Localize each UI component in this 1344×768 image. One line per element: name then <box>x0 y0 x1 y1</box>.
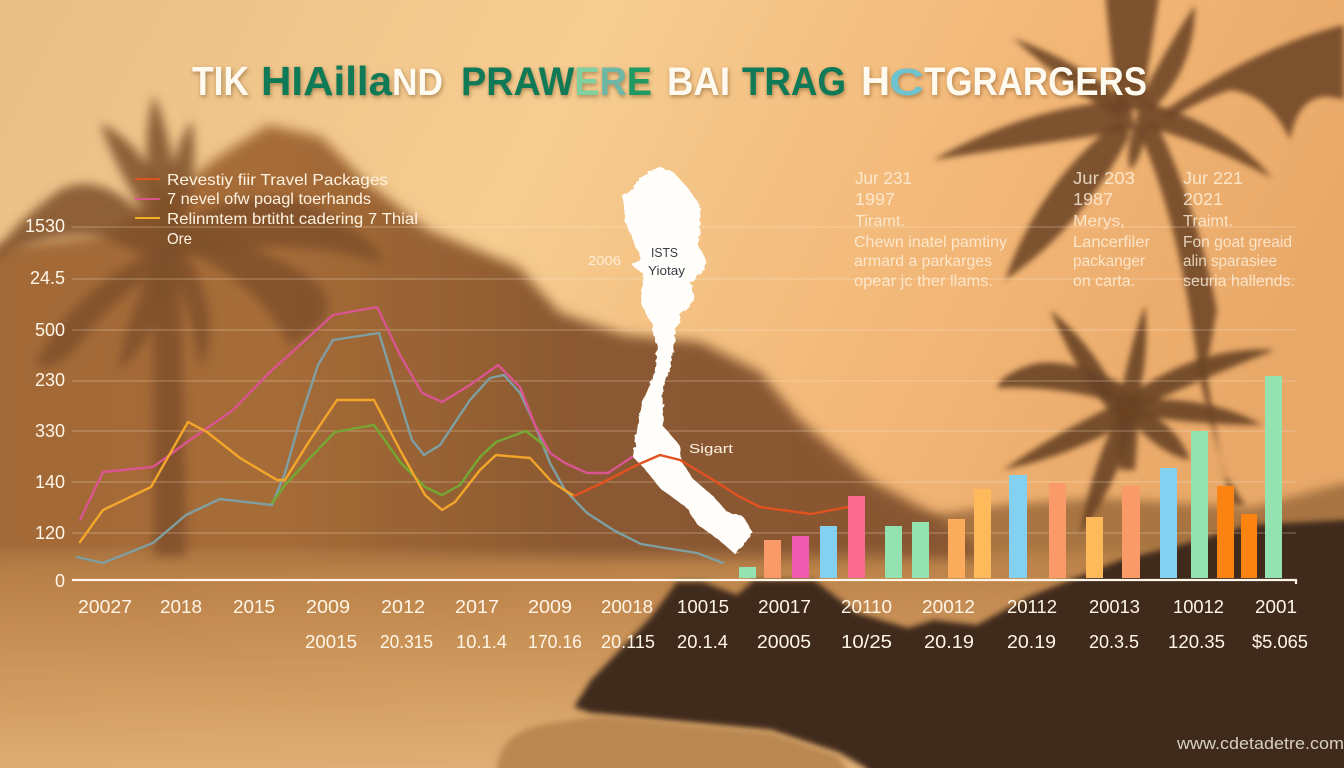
legend <box>135 172 418 248</box>
title <box>192 58 1147 104</box>
background: right large palm <box>933 0 1344 505</box>
background: right lower palm <box>997 305 1275 535</box>
x axis labels: first row: 10015 <box>677 597 729 617</box>
x axis labels: second row: 20015 <box>305 632 357 652</box>
x axis labels: second row: 20.19 <box>924 632 974 652</box>
x axis labels: second row: 20.3.5 <box>1089 632 1139 652</box>
callout: Jur 203: Lancerfiler <box>1073 234 1150 251</box>
callout: Jur 203 <box>1073 168 1150 290</box>
callout: Jur 203: on carta. <box>1073 273 1135 290</box>
x axis labels: second row: 20.315 <box>380 632 433 652</box>
legend item: gold line: Relinmtem brtitht cadering 7 Thial <box>167 211 418 228</box>
x axis labels: first row: 10012 <box>1173 597 1224 617</box>
x axis labels: first row: 2017 <box>455 597 499 617</box>
background: mid ridge right <box>900 483 1344 610</box>
x axis labels: first row: 20112 <box>1007 597 1057 617</box>
callout: Jur 231: 1997 <box>855 189 895 209</box>
x axis labels: second row: $5.065 <box>1252 632 1308 652</box>
y axis labels: 140 <box>35 472 65 492</box>
title: TRAG <box>742 60 846 104</box>
legend item: gold line: Ore <box>167 231 192 248</box>
line: red series <box>574 455 848 514</box>
title: ND <box>392 62 443 104</box>
y axis labels: 0 <box>55 571 65 591</box>
title: BAI <box>667 60 730 104</box>
x axis labels: first row: 20018 <box>601 597 653 617</box>
y axis labels: 120 <box>35 523 65 543</box>
callout: Jur 231: Jur 231 <box>855 168 912 188</box>
callout: Jur 221: Traimt. <box>1183 213 1233 230</box>
x axis labels: first row: 20017 <box>758 597 811 617</box>
callout: Jur 221: seuria hallends. <box>1183 273 1295 290</box>
map of Thailand <box>588 168 751 552</box>
line chart <box>77 307 848 563</box>
x axis labels: second row: 20.115 <box>601 632 655 652</box>
title: H <box>861 58 890 104</box>
callout: Jur 221: alin sparasiee <box>1183 253 1277 270</box>
x axis labels: first row <box>78 597 1297 617</box>
background: rock lump on sand <box>497 716 860 768</box>
x axis labels: first row: 2015 <box>233 597 275 617</box>
callout: Jur 221: Fon goat greaid <box>1183 234 1292 251</box>
title: TIK <box>192 58 249 104</box>
legend item: pink line: 7 nevel ofw poagl toerhands <box>167 191 371 208</box>
title: C <box>889 62 924 104</box>
x axis line <box>72 580 1296 584</box>
x axis labels: second row: 10.1.4 <box>456 632 507 652</box>
x axis labels: first row: 20110 <box>841 597 892 617</box>
y axis labels: 500 <box>35 320 65 340</box>
y axis labels: 1530 <box>25 216 65 236</box>
bar chart <box>739 376 1282 578</box>
callout: Jur 221: Jur 221 <box>1183 168 1243 188</box>
background: sand <box>0 552 1344 768</box>
line: green series <box>272 425 550 503</box>
gridlines <box>72 227 1296 533</box>
callout: Jur 231: armard a parkarges <box>854 253 992 270</box>
map label: central: Yiotay <box>648 264 686 278</box>
x axis labels: second row: 20005 <box>757 632 811 652</box>
map label: year: 2006 <box>588 253 621 268</box>
title: PRAWERE <box>461 60 652 104</box>
x axis labels: first row: 20013 <box>1089 597 1140 617</box>
x axis labels: first row: 20012 <box>922 597 975 617</box>
callout: Jur 203: Jur 203 <box>1073 168 1135 188</box>
x axis labels: first row: 2009 <box>528 597 572 617</box>
callout: Jur 231: Tiramt. <box>855 213 905 230</box>
title: HIAilla <box>261 58 393 104</box>
y axis labels: 330 <box>35 421 65 441</box>
x axis labels: second row: 10/25 <box>841 632 892 652</box>
x axis labels: first row: 2018 <box>160 597 202 617</box>
x axis labels: first row: 20027 <box>78 597 132 617</box>
x axis labels: second row: 20.19 <box>1007 632 1056 652</box>
background: dark foreground island <box>574 520 1344 768</box>
legend item: gold line <box>135 211 418 248</box>
map shape <box>624 168 751 552</box>
line: blue-grey series <box>77 333 723 563</box>
callout: Jur 231: Chewn inatel pamtiny <box>854 234 1007 251</box>
legend item: red line: Revestiy fiir Travel Packages <box>167 172 388 189</box>
x axis labels: first row: 2009 <box>306 597 350 617</box>
line: orange series <box>80 400 574 542</box>
background: mountain <box>0 125 990 558</box>
x axis labels: second row: 120.35 <box>1168 632 1225 652</box>
callout: Jur 203: 1987 <box>1073 189 1113 209</box>
x axis labels: second row <box>305 632 1308 652</box>
y axis labels: 230 <box>35 370 65 390</box>
background: left palm <box>0 95 385 556</box>
callout: Jur 203: packanger <box>1073 253 1145 270</box>
y axis labels: 24.5 <box>30 268 65 288</box>
map label: north: ISTS <box>651 246 678 260</box>
callout: Jur 203: Merys, <box>1073 213 1125 230</box>
callout: Jur 221 <box>1183 168 1295 290</box>
callout: Jur 231 <box>854 168 1007 290</box>
x axis labels: second row: 20.1.4 <box>677 632 728 652</box>
callout: Jur 221: 2021 <box>1183 189 1223 209</box>
x axis labels: first row: 2012 <box>381 597 425 617</box>
x axis labels: second row: 170.16 <box>528 632 582 652</box>
y axis labels <box>25 216 65 591</box>
line: pink series <box>80 307 632 520</box>
callout: Jur 231: opear jc ther llams. <box>854 273 993 290</box>
x axis labels: first row: 2001 <box>1255 597 1297 617</box>
title: TGRARGERS <box>924 60 1147 104</box>
map label: south: Sigart <box>689 441 733 456</box>
source URL: www.cdetadetre.com <box>1176 734 1344 753</box>
